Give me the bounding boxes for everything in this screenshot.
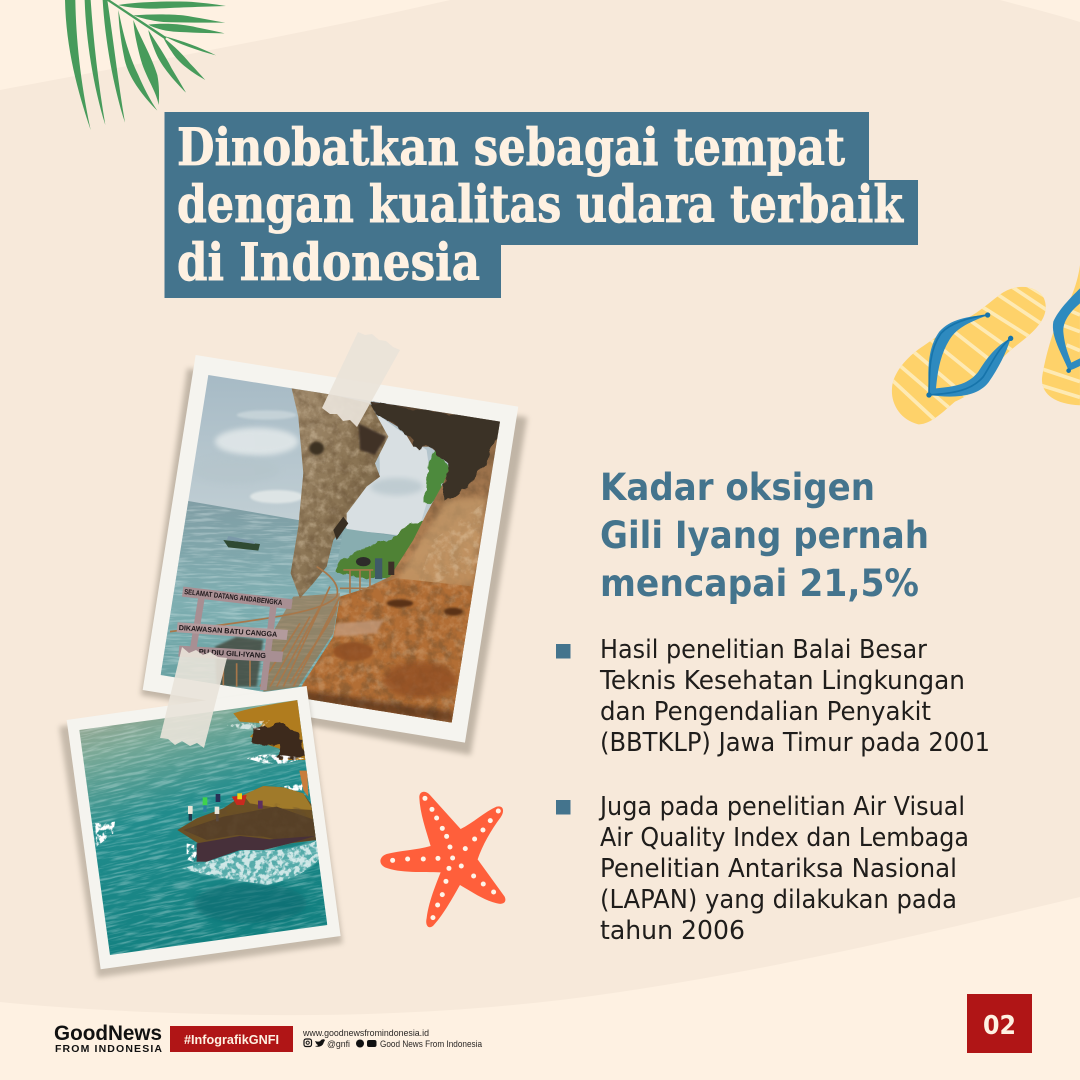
signboards: DIKAWASAN BATU CANGGA [179, 623, 278, 639]
icon: left flip flop strap [926, 312, 1013, 398]
rock trunk [291, 388, 388, 598]
photo image [150, 373, 507, 730]
bullet text: Air Quality Index dan Lembaga [600, 823, 969, 853]
bullet point: second research [556, 792, 969, 946]
icon: right flip flop [1042, 266, 1080, 406]
title text: dengan kualitas udara terbaik [177, 175, 904, 235]
people on rock [188, 793, 263, 821]
white surf [95, 720, 320, 885]
website and social: www.goodnewsfromindonesia.id [302, 1028, 429, 1039]
photo shadow [141, 368, 527, 755]
bullet text: Teknis Kesehatan Lingkungan [599, 666, 965, 696]
central rock [177, 786, 317, 862]
tape: top [322, 332, 400, 427]
bullet text [599, 635, 990, 758]
logo: FROM INDONESIA [55, 1043, 162, 1055]
subheading: mencapai 21,5% [600, 561, 919, 605]
people [356, 557, 394, 579]
bullet marker [556, 644, 570, 658]
footer [54, 1021, 483, 1055]
hashtag badge [170, 1026, 293, 1052]
photo image [79, 700, 328, 955]
signboards: SELAMAT DATANG ANDABENGKA [184, 587, 283, 607]
boat [223, 536, 260, 551]
logo: GoodNews [54, 1021, 162, 1045]
palm leaf [65, 0, 226, 130]
sky through arch [343, 415, 432, 537]
bullet text [598, 792, 969, 946]
website and social [302, 1028, 483, 1050]
photo: cliff arch polaroid [141, 355, 527, 755]
bullet marker [556, 800, 570, 814]
starfish body [380, 792, 505, 927]
bullet text: Juga pada penelitian Air Visual [598, 792, 965, 822]
page number [967, 994, 1032, 1053]
signboards: PU DIU GILI-IYANG [199, 647, 267, 660]
photo: coast polaroid [58, 686, 344, 980]
photo shadow [59, 690, 343, 978]
beach hut [299, 771, 308, 797]
icon: left flip flop sole [892, 286, 1046, 424]
starfish dots [390, 796, 501, 920]
icon: flip flops [892, 266, 1080, 424]
title block [164, 112, 918, 298]
title text: di Indonesia [177, 233, 480, 293]
bullet text: Penelitian Antariksa Nasional [600, 854, 957, 884]
icon: starfish [380, 792, 505, 927]
bullet text: (LAPAN) yang dilakukan pada [600, 885, 957, 915]
photo frame [143, 355, 518, 743]
title background [164, 112, 918, 298]
logo [54, 1021, 162, 1055]
trees [335, 519, 423, 578]
page number: 02 [983, 1011, 1016, 1041]
subheading: Gili Iyang pernah [600, 513, 929, 557]
bullet text: Hasil penelitian Balai Besar [600, 635, 927, 665]
rocky ground [293, 578, 473, 727]
bullet text: dan Pengendalian Penyakit [600, 697, 931, 727]
fence backdrop [263, 593, 340, 692]
bullet point: first research [556, 635, 990, 758]
website and social: Good News From Indonesia [380, 1039, 483, 1050]
subheading: Kadar oksigen [600, 465, 875, 509]
tape: bottom [160, 647, 227, 748]
signboards [177, 587, 293, 690]
right cliff [333, 402, 507, 730]
title text [177, 118, 904, 293]
bullet text: tahun 2006 [600, 916, 745, 946]
title text: Dinobatkan sebagai tempat [177, 118, 845, 178]
arch sea [337, 528, 398, 567]
bullet text: (BBTKLP) Jawa Timur pada 2001 [600, 728, 990, 758]
subheading [600, 465, 929, 605]
hashtag badge: #InfografikGNFI [184, 1032, 279, 1047]
fence [170, 567, 373, 687]
website and social: @gnfi [327, 1039, 350, 1050]
top rocks [233, 700, 308, 760]
photo frame [67, 686, 341, 969]
